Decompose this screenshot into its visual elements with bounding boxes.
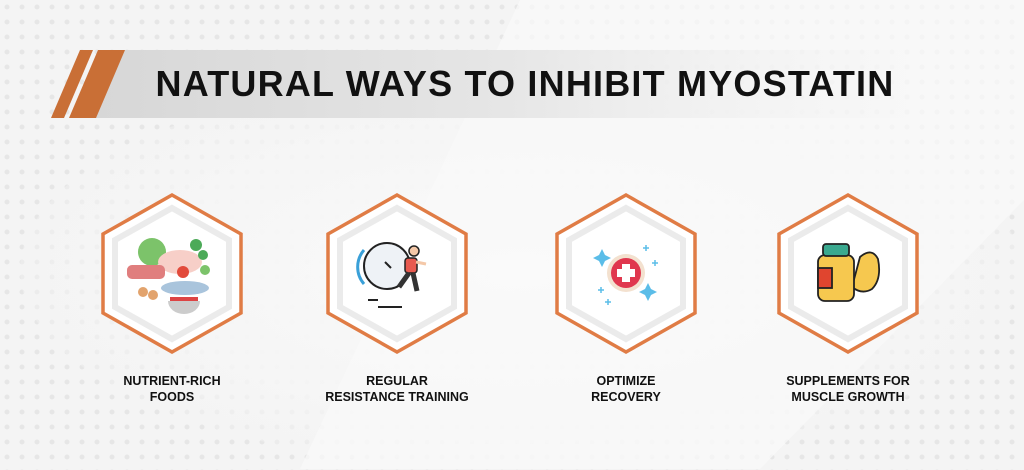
panel: optimize recovery	[557, 195, 695, 352]
label: supplements: SUPPLEMENTS FOR	[786, 374, 910, 388]
icon: supplement bottle with arm	[818, 244, 879, 301]
panel: regular resistance training	[328, 195, 466, 352]
icon: food	[127, 238, 210, 314]
icon: runner with stopwatch	[358, 243, 426, 307]
title: NATURAL WAYS TO INHIBIT MYOSTATIN	[156, 63, 894, 104]
label: optimize recovery: RECOVERY	[591, 390, 662, 404]
label: nutrient-rich foods: NUTRIENT-RICH	[123, 374, 221, 388]
icon: medical cross	[593, 245, 658, 305]
panel: supplements	[779, 195, 917, 352]
label: regular resistance training: REGULAR	[366, 374, 428, 388]
label: optimize recovery: OPTIMIZE	[596, 374, 656, 388]
panel: nutrient-rich foods	[103, 195, 241, 352]
orange stripes	[51, 50, 125, 118]
label: regular resistance training: RESISTANCE TRAINING	[325, 390, 469, 404]
label: nutrient-rich foods: FOODS	[150, 390, 194, 404]
title banner	[51, 50, 940, 118]
label: supplements: MUSCLE GROWTH	[791, 390, 905, 404]
